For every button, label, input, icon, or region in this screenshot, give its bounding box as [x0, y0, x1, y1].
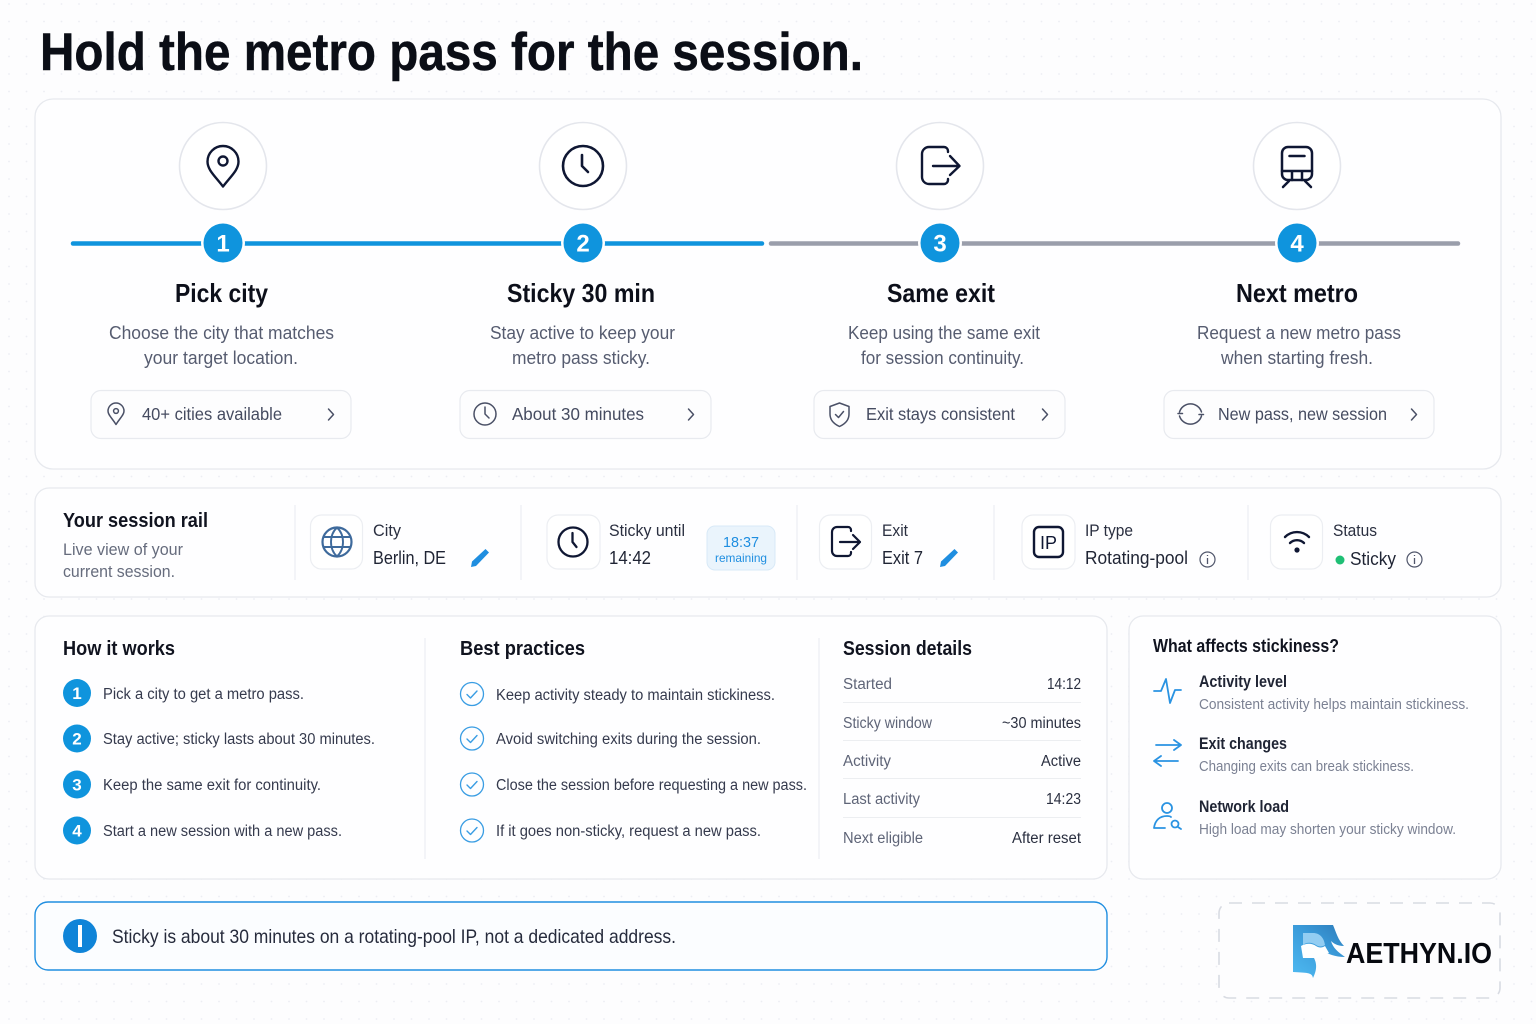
pill: cities available: 40+ cities available — [142, 404, 282, 424]
heading: Next metro — [1236, 278, 1358, 308]
practice row 4: If it goes non-sticky, request a new pass. — [496, 823, 761, 840]
step row 2 — [63, 724, 375, 752]
icon: exit arrow — [896, 122, 984, 210]
rail item: city: City — [373, 522, 402, 540]
heading: Same exit — [887, 278, 995, 308]
detail: sticky window: Sticky window — [843, 715, 933, 732]
badge: time remaining: remaining — [715, 551, 767, 565]
panel: what affects stickiness — [1129, 616, 1501, 879]
practice row 1 — [460, 682, 775, 706]
factor: exit changes: Changing exits can break stickiness. — [1199, 759, 1414, 775]
title: Hold the metro pass for the session. — [40, 23, 863, 82]
step row 2: Stay active; sticky lasts about 30 minutes. — [103, 731, 375, 748]
pill: about 30 minutes — [460, 390, 711, 438]
panel: how it works, best practices, session details — [35, 616, 1107, 879]
step 4: next metro — [1164, 122, 1434, 438]
detail: started: 14:12 — [1047, 676, 1081, 693]
step row 4: 4 — [72, 822, 82, 840]
icon: location pin — [180, 122, 266, 210]
section: session details — [843, 637, 1082, 847]
icon: info — [1407, 552, 1422, 567]
description: your target location. — [144, 347, 298, 368]
factor: exit changes: Exit changes — [1199, 735, 1287, 753]
step 1: pick city — [91, 122, 351, 438]
icon: IP box — [1022, 515, 1075, 569]
step row 1: Pick a city to get a metro pass. — [103, 686, 304, 703]
detail: last activity: 14:23 — [1046, 791, 1081, 808]
description: Stay active to keep your — [490, 322, 675, 343]
pill: cities available — [91, 390, 351, 438]
rail intro: Your session rail — [63, 509, 208, 532]
icon: swap arrows — [1154, 740, 1181, 766]
step row 3: 3 — [72, 776, 82, 794]
rail intro — [63, 509, 208, 581]
pill: about 30 minutes: About 30 minutes — [512, 404, 644, 424]
icon: wifi — [1270, 515, 1322, 569]
detail: activity — [843, 753, 1081, 770]
panel: four-step timeline — [35, 99, 1501, 469]
description: Request a new metro pass — [1197, 322, 1401, 343]
factor: exit changes — [1154, 735, 1414, 775]
rail item: status: Status — [1333, 522, 1377, 540]
badge: time remaining: 18:37 — [723, 534, 759, 551]
detail: activity: Activity — [843, 753, 891, 770]
status dot — [1336, 556, 1344, 564]
detail: next eligible: After reset — [1012, 830, 1082, 847]
section: how it works — [63, 637, 375, 844]
factor: activity level — [1154, 673, 1469, 713]
practice row 1: Keep activity steady to maintain stickiness. — [496, 687, 775, 704]
rail item: ip type: IP type — [1085, 522, 1133, 540]
logo mark — [1293, 925, 1345, 978]
pill: exit stays consistent — [814, 390, 1065, 438]
heading: Sticky 30 min — [507, 278, 655, 308]
description: when starting fresh. — [1220, 347, 1373, 368]
logo: AETHYN.IO — [1293, 925, 1492, 978]
step row 2: 2 — [72, 730, 82, 748]
factor: network load: High load may shorten your sticky window. — [1199, 822, 1456, 838]
icon: train — [1254, 122, 1340, 210]
heading: What affects stickiness? — [1153, 636, 1339, 656]
rail item: ip type: Rotating-pool — [1085, 547, 1188, 568]
detail: sticky window — [843, 715, 1081, 732]
logo wordmark: AETHYN.IO — [1346, 938, 1492, 970]
step number 2: 2 — [576, 230, 590, 258]
description: Keep using the same exit — [848, 322, 1040, 343]
icon: pulse — [1154, 679, 1181, 703]
rail item: sticky until: 14:42 — [609, 547, 651, 568]
pill: exit stays consistent: Exit stays consistent — [866, 404, 1015, 424]
detail: next eligible — [843, 830, 1082, 847]
detail: next eligible: Next eligible — [843, 830, 923, 847]
factor: activity level: Consistent activity helps maintain stickiness. — [1199, 697, 1469, 713]
icon: IP box: IP — [1040, 533, 1057, 553]
factor: network load: Network load — [1199, 798, 1289, 816]
icon: globe — [310, 515, 362, 569]
rail item: sticky until — [547, 515, 775, 570]
icon: info — [1200, 552, 1215, 567]
section: session details: Session details — [843, 637, 972, 660]
icon: info badge — [63, 919, 97, 953]
detail: last activity: Last activity — [843, 791, 920, 808]
detail: started: Started — [843, 676, 892, 693]
description: for session continuity. — [861, 347, 1024, 368]
rail item: city: Berlin, DE — [373, 547, 446, 568]
heading: Pick city — [175, 278, 268, 308]
step number 3: 3 — [933, 230, 947, 258]
rail item: exit: Exit — [882, 522, 908, 540]
description: Choose the city that matches — [109, 322, 334, 343]
detail: activity: Active — [1041, 753, 1081, 770]
badge: time remaining — [707, 526, 775, 570]
rail item: status: Sticky — [1350, 548, 1397, 569]
step 3: same exit — [814, 122, 1065, 438]
rail item: sticky until: Sticky until — [609, 522, 685, 540]
step number 4: 4 — [1290, 230, 1304, 258]
rail item: ip type — [1022, 515, 1215, 569]
step number 2 — [561, 221, 605, 265]
practice row 2: Avoid switching exits during the session. — [496, 731, 761, 748]
practice row 4 — [460, 819, 761, 842]
step row 3: Keep the same exit for continuity. — [103, 777, 321, 794]
pill: new pass new session — [1164, 390, 1434, 438]
step number 3 — [918, 221, 962, 265]
callout: sticky note — [35, 902, 1107, 970]
rail item: status — [1270, 515, 1422, 569]
icon: exit — [820, 515, 872, 569]
step row 3 — [63, 770, 321, 798]
icon: pencil — [471, 549, 489, 567]
logo placeholder frame — [1219, 903, 1500, 998]
step number 1 — [201, 221, 245, 265]
pill: new pass new session: New pass, new session — [1218, 404, 1387, 424]
detail: sticky window: ~30 minutes — [1002, 715, 1081, 732]
step row 1: 1 — [72, 684, 82, 703]
icon: clock — [547, 515, 600, 569]
practice row 3: Close the session before requesting a new pass. — [496, 777, 807, 794]
step number 1: 1 — [216, 230, 230, 258]
rail item: exit — [820, 515, 958, 569]
step row 4 — [63, 816, 342, 844]
detail: last activity — [843, 791, 1081, 808]
detail: started — [843, 676, 1081, 693]
step number 4 — [1275, 221, 1319, 265]
section: best practices — [460, 637, 807, 842]
icon: person with magnifier — [1154, 803, 1181, 829]
panel: session rail — [35, 488, 1501, 597]
step row 4: Start a new session with a new pass. — [103, 823, 342, 840]
icon: clock — [540, 122, 626, 210]
factor: activity level: Activity level — [1199, 673, 1287, 691]
description: metro pass sticky. — [512, 347, 650, 368]
practice row 3 — [460, 773, 807, 796]
description — [848, 322, 1040, 368]
factor: network load — [1154, 798, 1456, 838]
rail item: exit: Exit 7 — [882, 547, 923, 568]
section: how it works: How it works — [63, 637, 175, 660]
section: best practices: Best practices — [460, 637, 585, 660]
description — [109, 322, 334, 368]
description — [1197, 322, 1401, 368]
rail item: city — [310, 515, 489, 569]
description — [490, 322, 675, 368]
rail intro: current session. — [63, 563, 175, 581]
practice row 2 — [460, 727, 761, 750]
icon: pencil — [940, 549, 958, 567]
progress line — [73, 241, 1458, 246]
step row 1 — [63, 679, 304, 707]
rail intro: Live view of your — [63, 541, 183, 559]
callout text: Sticky is about 30 minutes on a rotating-pool IP, not a dedicated address. — [112, 926, 676, 948]
step 2: sticky 30 min — [460, 122, 711, 438]
